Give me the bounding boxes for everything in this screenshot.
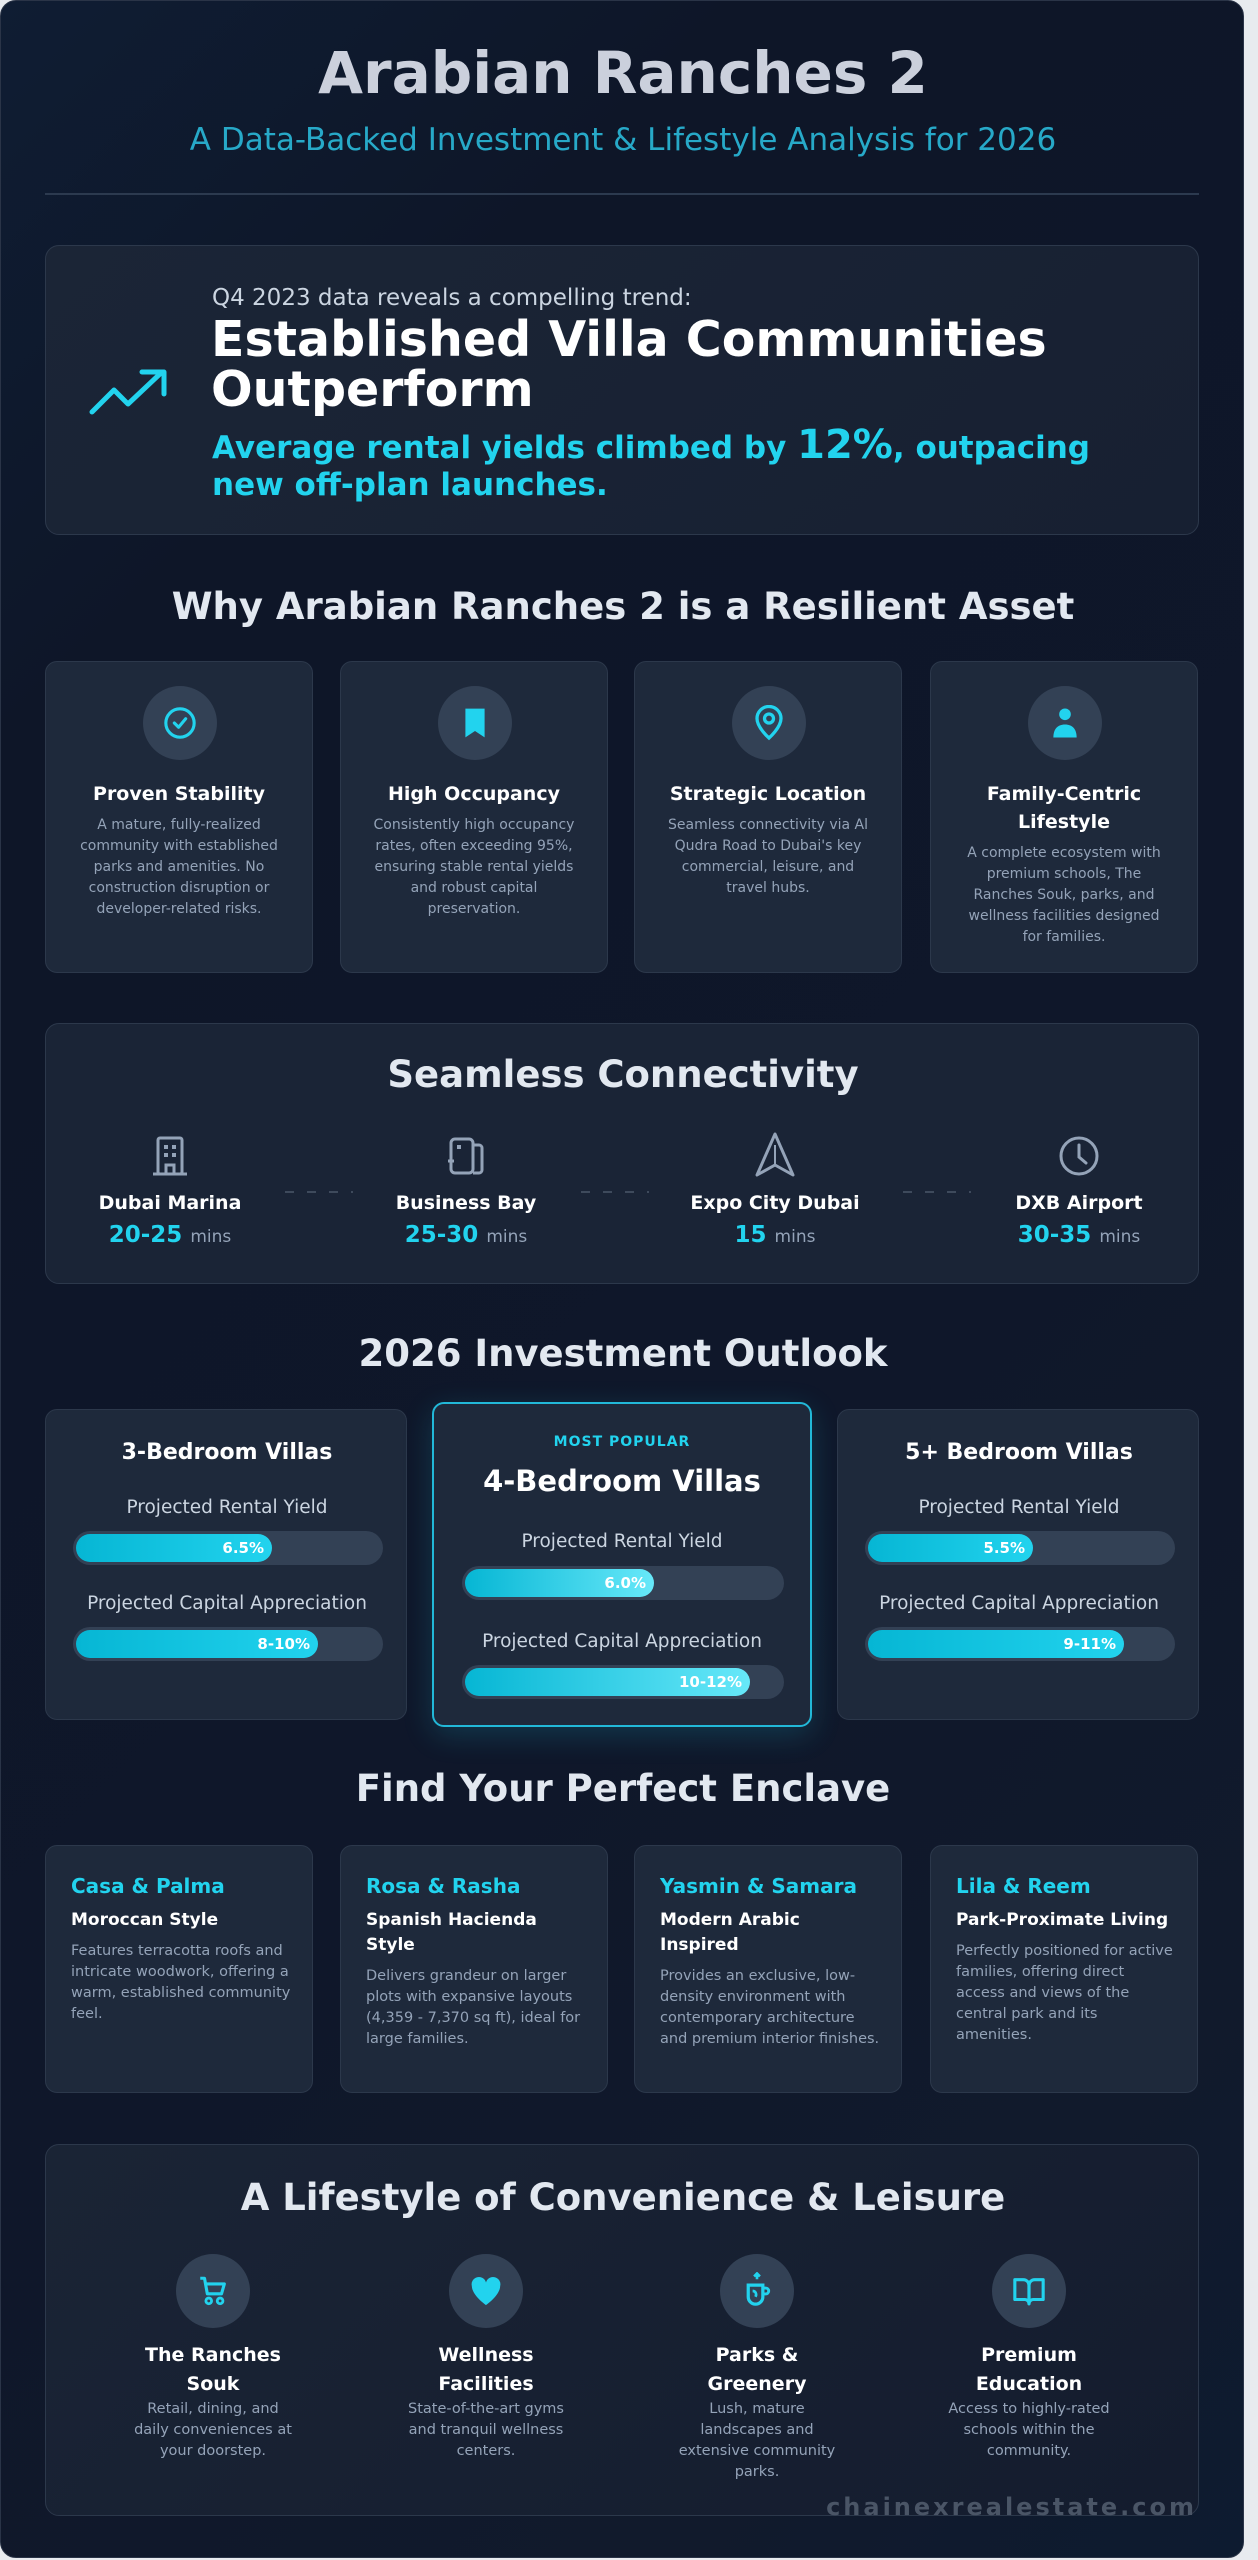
item: education: Access to highly-rated schools within the community. bbox=[948, 2401, 1110, 2459]
connection: business bay: 25-30 mins bbox=[405, 1222, 527, 1248]
heading: connectivity: Seamless Connectivity bbox=[387, 1053, 859, 1096]
icon: park bbox=[720, 2254, 794, 2328]
card: lila & reem: Park-Proximate Living bbox=[956, 1910, 1168, 1930]
card: 3-bedroom villas: 3-Bedroom Villas bbox=[122, 1440, 332, 1465]
card: high occupancy: High Occupancy bbox=[388, 783, 560, 805]
heading: investment outlook: 2026 Investment Outlook bbox=[358, 1332, 888, 1375]
text: key stat: Average rental yields climbed by 12%, outpacing new off-plan launches. bbox=[212, 422, 1090, 503]
card: proven stability: Proven Stability bbox=[93, 783, 265, 805]
item: ranches souk: Souk bbox=[187, 2373, 239, 2395]
card: rosa & rasha: Rosa & Rasha bbox=[366, 1874, 520, 1898]
item: ranches souk: The Ranches bbox=[145, 2344, 281, 2366]
panel: feature cards bbox=[45, 661, 1198, 973]
icon: building bbox=[153, 1136, 187, 1176]
heading: lifestyle: A Lifestyle of Convenience & Leisure bbox=[241, 2176, 1005, 2219]
connection: expo city: 15 mins bbox=[735, 1222, 815, 1248]
connection: business bay bbox=[396, 1192, 536, 1248]
item: education: Education bbox=[976, 2373, 1082, 2395]
card: family-centric: A complete ecosystem with premium schools, The Ranches Souk, parks, and wellness facilities designed for families. bbox=[967, 845, 1161, 945]
card: 4-bedroom villas (most popular): 4-Bedroom Villas bbox=[483, 1464, 761, 1498]
item: education: Premium bbox=[981, 2344, 1077, 2366]
connection: dxb airport: 30-35 mins bbox=[1018, 1222, 1140, 1248]
panel: hero insight bbox=[45, 245, 1199, 535]
icon: heart bbox=[449, 2254, 523, 2328]
card: 5+ bedroom villas: 5+ Bedroom Villas bbox=[905, 1440, 1133, 1465]
card: 5+ bedroom villas: 9-11% bbox=[1063, 1635, 1116, 1653]
icon: navigation bbox=[756, 1132, 794, 1177]
card: 5+ bedroom villas: Projected Capital Appreciation bbox=[879, 1593, 1159, 1614]
card: 3-bedroom villas: 6.5% bbox=[222, 1539, 264, 1557]
card: strategic location: Strategic Location bbox=[670, 783, 866, 805]
card: 3-bedroom villas: 8-10% bbox=[257, 1635, 310, 1653]
card: 3-bedroom villas: Projected Capital Appreciation bbox=[87, 1593, 367, 1614]
card: 3-bedroom villas: Projected Rental Yield bbox=[126, 1497, 328, 1518]
connection: expo city: Expo City Dubai bbox=[690, 1192, 860, 1214]
icon: clock bbox=[1060, 1136, 1098, 1176]
heading: why resilient: Why Arabian Ranches 2 is a Resilient Asset bbox=[172, 585, 1074, 628]
card: 5+ bedroom villas bbox=[837, 1409, 1199, 1720]
connection: dubai marina: Dubai Marina bbox=[99, 1192, 241, 1214]
icon: briefcase bbox=[448, 1138, 484, 1174]
card: yasmin & samara bbox=[634, 1845, 902, 2093]
connection: expo city bbox=[690, 1192, 860, 1248]
icon: trend up arrow bbox=[90, 370, 166, 414]
card: rosa & rasha bbox=[340, 1845, 608, 2093]
card: 5+ bedroom villas: Projected Rental Yield bbox=[918, 1497, 1120, 1518]
connection: dxb airport: DXB Airport bbox=[1015, 1192, 1143, 1214]
panel: lifestyle bbox=[45, 2144, 1199, 2516]
connection: dubai marina bbox=[99, 1192, 241, 1248]
card: lila & reem: Perfectly positioned for active families, offering direct access and views of the central park and its amenities. bbox=[956, 1943, 1173, 2043]
card: 4-bedroom villas (most popular): 10-12% bbox=[679, 1673, 742, 1691]
panel: seamless connectivity bbox=[45, 1023, 1199, 1284]
connection: dxb airport bbox=[1015, 1192, 1143, 1248]
card: strategic location bbox=[634, 661, 902, 973]
card: casa & palma: Moroccan Style bbox=[71, 1910, 218, 1930]
item: education bbox=[948, 2344, 1110, 2459]
item: parks bbox=[679, 2344, 835, 2480]
card: 4-bedroom villas (most popular) bbox=[432, 1402, 812, 1727]
card: high occupancy bbox=[340, 661, 608, 973]
card: yasmin & samara: Modern Arabic Inspired bbox=[660, 1910, 800, 1955]
connection: dubai marina: 20-25 mins bbox=[109, 1222, 231, 1248]
card: strategic location: Seamless connectivity via Al Qudra Road to Dubai's key commercial, leisure, and travel hubs. bbox=[668, 817, 868, 896]
item: parks: Parks & bbox=[716, 2344, 798, 2366]
card: family-centric bbox=[930, 661, 1198, 973]
item: parks: Lush, mature landscapes and extensive community parks. bbox=[679, 2401, 835, 2480]
card: 4-bedroom villas (most popular): Projected Capital Appreciation bbox=[482, 1631, 762, 1652]
card: casa & palma: Casa & Palma bbox=[71, 1874, 225, 1898]
card: 4-bedroom villas (most popular): Projected Rental Yield bbox=[521, 1531, 723, 1552]
card: 4-bedroom villas (most popular): 6.0% bbox=[604, 1574, 646, 1592]
card: lila & reem: Lila & Reem bbox=[956, 1874, 1091, 1898]
item: wellness: Wellness bbox=[438, 2344, 534, 2366]
item: ranches souk: Retail, dining, and daily conveniences at your doorstep. bbox=[134, 2401, 292, 2459]
card: rosa & rasha: Spanish Hacienda Style bbox=[366, 1910, 537, 1955]
item: wellness bbox=[408, 2344, 564, 2459]
text: intro: Q4 2023 data reveals a compelling trend: bbox=[212, 285, 692, 311]
card: 4-bedroom villas (most popular): MOST POPULAR bbox=[554, 1434, 690, 1450]
text: headline: Established Villa Communities Outperform bbox=[211, 311, 1047, 418]
card: lila & reem bbox=[930, 1845, 1198, 2093]
connection: business bay: Business Bay bbox=[396, 1192, 536, 1214]
item: wellness: State-of-the-art gyms and tranquil wellness centers. bbox=[408, 2401, 564, 2459]
card: family-centric: Lifestyle bbox=[1018, 811, 1110, 833]
subtitle: A Data-Backed Investment & Lifestyle Analysis for 2026 bbox=[190, 122, 1056, 158]
card: rosa & rasha: Delivers grandeur on larger plots with expansive layouts (4,359 - 7,370 sq ft), ideal for large families. bbox=[366, 1968, 580, 2047]
item: wellness: Facilities bbox=[438, 2373, 534, 2395]
card: proven stability bbox=[45, 661, 313, 973]
card: family-centric: Family-Centric bbox=[987, 783, 1141, 805]
item: parks: Greenery bbox=[708, 2373, 806, 2395]
card: yasmin & samara: Yasmin & Samara bbox=[660, 1874, 857, 1898]
heading: enclaves: Find Your Perfect Enclave bbox=[356, 1767, 890, 1810]
card: yasmin & samara: Provides an exclusive, low-density environment with contemporary architecture and premium interior finishes. bbox=[660, 1968, 879, 2047]
item: ranches souk bbox=[134, 2344, 292, 2459]
card: 3-bedroom villas bbox=[45, 1409, 407, 1720]
card: casa & palma: Features terracotta roofs and intricate woodwork, offering a warm, established community feel. bbox=[71, 1943, 290, 2022]
card: 5+ bedroom villas: 5.5% bbox=[983, 1539, 1025, 1557]
watermark: chainexrealestate.com bbox=[826, 2493, 1197, 2521]
icon: book bbox=[992, 2254, 1066, 2328]
icon: cart bbox=[176, 2254, 250, 2328]
card: proven stability: A mature, fully-realized community with established parks and amenities. No construction disruption or developer-related risks. bbox=[80, 817, 278, 917]
card: casa & palma bbox=[45, 1845, 313, 2093]
title: Arabian Ranches 2 bbox=[318, 39, 928, 107]
card: high occupancy: Consistently high occupancy rates, often exceeding 95%, ensuring stable rental yields and robust capital preservation. bbox=[374, 817, 574, 917]
